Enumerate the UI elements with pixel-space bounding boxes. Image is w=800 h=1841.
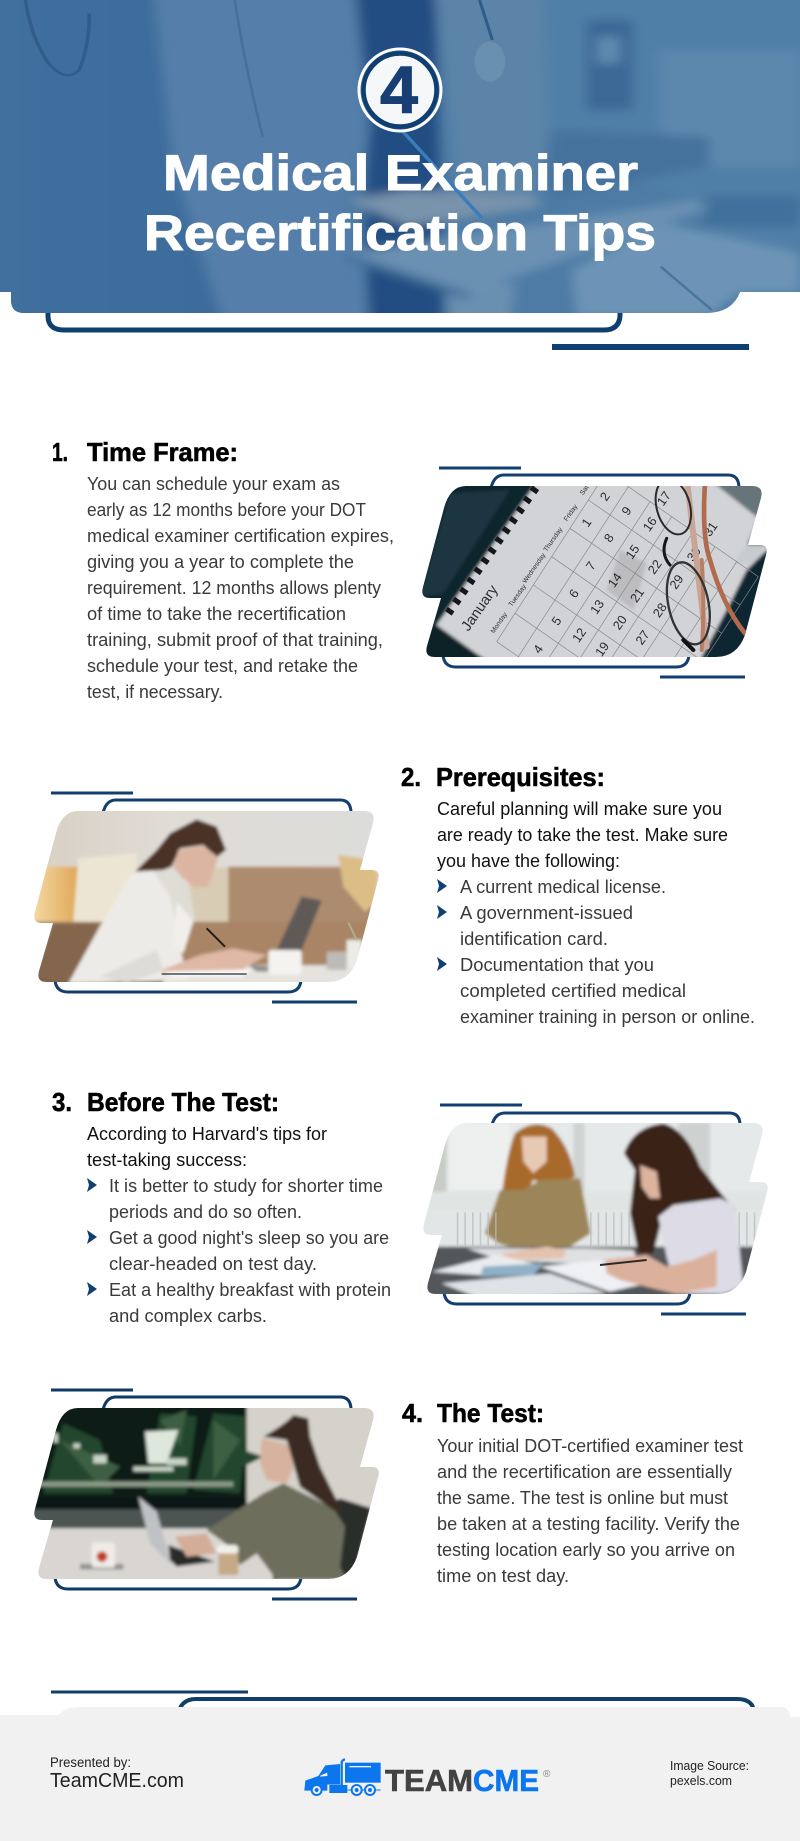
section 1: time frame text: medical examiner certification expires, [87, 526, 394, 546]
section 2: prerequisites text: completed certified medical [460, 981, 686, 1001]
section 4: the test text: the same. The test is online but must [437, 1488, 728, 1508]
calendar grid [496, 486, 758, 657]
image source credit [670, 1758, 749, 1788]
section 1: calendar photo: 22 [645, 557, 665, 577]
number badge: 4 [380, 53, 418, 128]
section 1: calendar photo: 31 [701, 520, 720, 539]
icon: truck [304, 1759, 381, 1795]
presented by credit: Presented by: [50, 1755, 131, 1770]
section 3: before the test text: test-taking success: [87, 1150, 247, 1170]
section 1: calendar photo: 17 [654, 489, 674, 508]
shirt [68, 863, 187, 983]
section 1: time frame text: test, if necessary. [87, 682, 223, 702]
section 1: time frame text: schedule your test, and retake the [87, 656, 358, 676]
section 1: calendar photo: 1 [579, 516, 594, 530]
section 3: before the test text: 3. [52, 1087, 72, 1117]
section 4: woman typing photo [27, 1390, 387, 1599]
section 4: the test text [402, 1398, 743, 1586]
section 1: calendar photo: Wednesday [522, 552, 548, 585]
section 1: time frame text: You can schedule your exam as [87, 474, 340, 494]
section 4: the test text: time on test day. [437, 1566, 569, 1586]
section 1: time frame text: requirement. 12 months allows plenty [87, 578, 381, 598]
chair [267, 1498, 372, 1580]
section 1: calendar photo: 5 [549, 614, 564, 628]
stethoscope lines [26, 0, 89, 75]
header accent line [552, 344, 749, 350]
logo: truck and TEAMCME wordmark [304, 1759, 551, 1798]
section 1: time frame text: 1. [52, 437, 68, 467]
laptop [138, 1497, 172, 1565]
footer accent line [51, 1690, 248, 1694]
right coat [434, 0, 550, 213]
section 2: prerequisites text: Careful planning will make sure you [437, 799, 722, 819]
image source credit: Image Source: [670, 1758, 749, 1773]
hair [263, 1415, 343, 1513]
section 1: calendar photo: Friday [563, 503, 580, 523]
hands and clipboard [347, 190, 541, 227]
section 2: prerequisites text: identification card. [460, 929, 608, 949]
section 1: calendar photo: 9 [619, 504, 634, 518]
title: Medical Examiner [163, 145, 638, 201]
section 1: calendar photo: 15 [623, 542, 642, 562]
title [144, 145, 656, 261]
section 1: calendar photo: January [459, 582, 502, 634]
section 1: calendar photo: 27 [633, 628, 652, 647]
woman left [500, 1123, 577, 1193]
section 3: before the test text: According to Harvard's tips for [87, 1124, 327, 1144]
section 4: the test text: and the recertification are essentially [437, 1462, 732, 1482]
logo: truck and TEAMCME wordmark: CME [473, 1763, 539, 1798]
section 4: the test text: Your initial DOT-certified examiner test [437, 1436, 743, 1456]
section 1: calendar photo: 19 [593, 640, 612, 659]
footer decorative frame [178, 1699, 754, 1716]
section 2: prerequisites text: Documentation that you [460, 955, 654, 975]
section 2: prerequisites text: Prerequisites: [436, 762, 605, 792]
dark tie strip [355, 0, 444, 327]
section 3: before the test text: Eat a healthy breakfast with protein [109, 1280, 391, 1300]
section 3: before the test text: Get a good night's sleep so you are [109, 1228, 389, 1248]
glasses [650, 475, 745, 650]
room background [734, 292, 740, 302]
section 1: calendar photo: Tuesday [508, 583, 528, 608]
footer [0, 1690, 800, 1841]
presented by credit [50, 1755, 184, 1792]
section 3: before the test text: clear-headed on test day. [109, 1254, 317, 1274]
section 2: woman at laptop photo [27, 793, 387, 1002]
section 1: calendar photo: 8 [601, 531, 617, 545]
section 1: calendar photo: Sat [579, 484, 591, 497]
section 3: before the test text: It is better to study for shorter time [109, 1176, 383, 1196]
section 1: calendar photo: 29 [667, 572, 686, 592]
header banner [0, 0, 800, 350]
section 1: calendar photo: 16 [640, 515, 660, 534]
section 2: prerequisites text: you have the following: [437, 851, 620, 871]
bullet arrows [437, 879, 447, 971]
section 1: time frame text: Time Frame: [87, 437, 238, 467]
section 1: time frame text: training, submit proof of that training, [87, 630, 383, 650]
section 3: before the test text [52, 1087, 391, 1326]
cup and cube [218, 1547, 238, 1575]
section 2: prerequisites text: A government-issued [460, 903, 633, 923]
radiator fins [456, 1212, 762, 1246]
section 4: the test text: The Test: [437, 1398, 544, 1428]
footer background [0, 1707, 800, 1841]
presented by credit: TeamCME.com [50, 1770, 184, 1792]
number badge [359, 49, 441, 131]
books [432, 1255, 540, 1275]
section 1: calendar photo: 30 [684, 545, 704, 564]
section 2: prerequisites text: examiner training in person or online. [460, 1007, 755, 1027]
section 1: calendar photo: Monday [490, 611, 509, 635]
middle coat [153, 0, 372, 327]
section 1: time frame text: of time to take the recertification [87, 604, 346, 624]
section 2: prerequisites text [401, 762, 755, 1027]
logo: truck and TEAMCME wordmark: ® [543, 1769, 551, 1780]
section 1: time frame text: giving you a year to complete the [87, 552, 354, 572]
logo: truck and TEAMCME wordmark: TEAM [385, 1763, 473, 1798]
left coat [0, 0, 224, 327]
woman right [624, 1123, 737, 1253]
section 3: two students photo [413, 1105, 773, 1314]
spiral binding [448, 487, 537, 613]
section 4: the test text: be taken at a testing facility. Verify the [437, 1514, 740, 1534]
bullet arrows [87, 1178, 97, 1296]
hair [135, 819, 226, 872]
section 3: before the test text: periods and do so often. [109, 1202, 302, 1222]
section 1: calendar photo: 14 [605, 571, 625, 590]
section 1: time frame text [52, 437, 394, 702]
shirt [207, 1483, 347, 1580]
section 2: prerequisites text: A current medical license. [460, 877, 666, 897]
plant foliage [43, 1413, 263, 1493]
section 1: calendar photo: 4 [531, 642, 546, 656]
section 1: calendar photo: 13 [588, 597, 607, 617]
section 1: calendar photo: 2 [597, 490, 613, 504]
laptop [277, 897, 322, 950]
section 1: calendar photo: 21 [628, 586, 647, 605]
section 4: the test text: 4. [402, 1398, 423, 1428]
header photo: doctors with blue tint [0, 0, 800, 327]
section 1: calendar photo: 20 [610, 613, 630, 632]
section 1: calendar photo: 6 [566, 587, 582, 601]
image source credit: pexels.com [670, 1773, 732, 1788]
section 2: prerequisites text: 2. [401, 762, 421, 792]
section 2: prerequisites text: are ready to take the test. Make sure [437, 825, 728, 845]
section 4: the test text: testing location early so you arrive on [437, 1540, 735, 1560]
section 1: calendar photo: Thursday [543, 526, 565, 553]
section 3: before the test text: Before The Test: [87, 1087, 279, 1117]
section 3: before the test text: and complex carbs. [109, 1306, 267, 1326]
section 1: calendar photo [422, 466, 767, 678]
face [173, 846, 218, 887]
section 1: time frame text: early as 12 months before your DOT [87, 500, 366, 520]
section 1: calendar photo: 7 [583, 559, 599, 573]
header decorative frame [48, 300, 620, 330]
section 1: calendar photo: 28 [650, 601, 670, 620]
title: Recertification Tips [144, 205, 656, 261]
section 1: calendar photo: 12 [570, 626, 589, 645]
